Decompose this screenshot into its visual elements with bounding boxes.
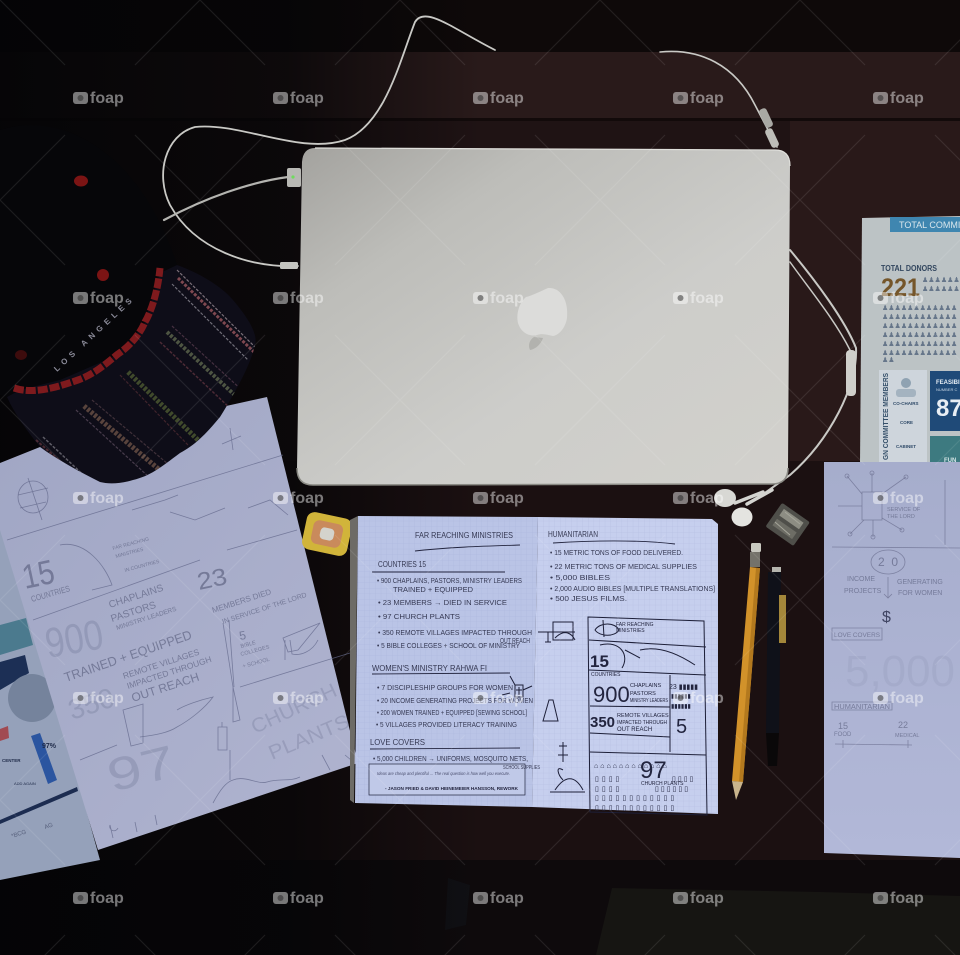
watermark row 3: foap [290,490,324,507]
watermark row 2: foap [490,290,524,307]
printed report, top right: ♟♟ [882,356,895,364]
thumbnail infographic sketch: PASTORS [630,691,656,697]
printed report, top right: FUN [944,458,956,464]
pencil sketch paper: COUNTRIES [30,583,71,604]
icon: apple logo [517,288,567,350]
pencil sketch paper: PASTORS [110,600,158,625]
printed report, top right: CO-CHAIRS [893,401,918,406]
watermark row 5: foap [690,890,724,907]
left page text: FAR REACHING MINISTRIES [415,530,513,540]
metal pencil sharpener [765,503,810,546]
notebook with handwritten plan [350,516,718,815]
watermark row 3: foap [90,490,124,507]
thumbnail infographic sketch: COUNTRIES [591,672,621,678]
sketch paper, bottom right: FOOD [834,732,852,738]
thumbnail infographic sketch: ▮▮▮▮▮▮ [671,694,691,700]
sketch paper, bottom right: FOR WOMEN [898,590,942,597]
right page text: • 22 METRIC TONS OF MEDICAL SUPPLIES [550,564,697,571]
thumbnail infographic sketch: ▮▮▮▮▮▮ [671,704,691,710]
thumbnail infographic sketch: ⌂⌂⌂⌂⌂⌂⌂⌂⌂⌂⌂⌂ [594,763,669,770]
watermark row 1: foap [290,90,324,107]
printed infographic under the sketch, left edge: AG [44,822,54,831]
watermark row 3 [73,490,924,507]
left page text: • 20 INCOME GENERATING PROJECTS FOR WOMEN [377,698,533,705]
pencil sketch paper: 350 [64,682,118,726]
pencil sketch paper: 97 [102,735,180,802]
magsafe charger plug [280,168,301,269]
left page text: WOMEN'S MINISTRY RAHWA FI [372,663,487,673]
earbuds and remote [714,107,856,526]
printed report, top right: ♟♟♟♟♟♟♟♟♟♟♟♟ [882,313,957,321]
sketch paper, bottom right: GENERATING [897,579,943,586]
thumbnail infographic sketch: ▯▯▯▯▯▯▯▯▯▯▯▯ [595,795,677,802]
pencil sketch paper: 15 [19,553,58,597]
printed report, top right: TOTAL DONORS [881,264,938,273]
thumbnail infographic sketch: ▯▯▯▯ [595,776,622,783]
left page text: - JASON FRIED & DAVID HEINEMEIER HANSSON, REWORK [385,786,519,792]
sketch paper, bottom right: LOVE COVERS [834,632,881,639]
left page text: LOVE COVERS [370,737,425,747]
thumbnail infographic sketch: 97 [640,757,667,784]
sketch paper, bottom right: PROJECTS [844,588,882,595]
baseball cap [7,176,256,484]
watermark row 5 [73,890,924,907]
thumbnail infographic sketch: IMPACTED THROUGH [617,720,667,726]
doodles beside sketch panel [502,622,585,792]
silver laptop lid [297,148,790,485]
watermark row 3: foap [690,490,724,507]
sketch paper, bottom right: HUMANITARIAN [834,702,890,711]
black pen [766,567,786,766]
pencil sketch paper [0,397,358,850]
right page text: HUMANITARIAN [548,529,598,539]
white charging and headphone cables [163,16,856,500]
watermark row 4: foap [90,690,124,707]
printed report, top right: CORE [900,420,913,425]
printed report, top right: CABINET [896,444,916,449]
watermark row 4 [73,690,924,707]
foap watermarks [73,90,924,907]
woven stripes on brim [36,270,255,484]
printed report, top right: NUMBER C [936,387,957,392]
pencil sketch paper: 900 [41,611,107,667]
pencil sketch paper: MINISTRIES [115,547,145,560]
watermark row 1 [73,90,924,107]
pencil sketch paper: + SCHOOL [242,657,271,670]
pencil sketch paper: MEMBERS DIED [211,587,273,615]
left page text: • 5 BIBLE COLLEGES + SCHOOL OF MINISTRY [377,643,520,650]
watermark row 1: foap [890,90,924,107]
sketch paper, bottom right: 20 [878,555,898,569]
left page text: • 23 MEMBERS → DIED IN SERVICE [378,600,507,607]
watermark row 4: foap [290,690,324,707]
pencil sketch paper: IMPACTED THROUGH [126,654,213,691]
printed report, top right: ♟♟♟♟♟♟♟♟♟♟♟♟ [882,331,957,339]
printed report, top right: GN COMMITTEE MEMBERS [883,373,890,460]
pencil sketch paper: OUT REACH [130,670,201,705]
printed infographic under the sketch, left edge: 97% [42,743,57,750]
pencil sketch paper: MINISTRY LEADERS [115,606,178,632]
sketch paper, bottom right: MEDICAL [895,733,919,739]
pencil sketch paper: TRAINED + EQUIPPED [62,627,194,685]
pencil sketch paper: IN COUNTRIES [124,559,161,574]
watermark row 3: foap [490,490,524,507]
watermark row 1: foap [490,90,524,107]
left page text: • 900 CHAPLAINS, PASTORS, MINISTRY LEADERS [377,578,522,585]
thumbnail infographic sketch: ▯▯▯▯ [672,776,695,783]
pencil sketch paper: BIBLE [240,640,257,650]
thumbnail infographic sketch: CHURCH PLANTS [641,781,684,787]
printed report, top right: ♟♟♟♟♟♟ [922,285,960,293]
thumbnail infographic sketch [588,617,707,815]
pencil sketch paper: PLANTS [265,711,353,765]
sketch paper, bottom right [824,462,960,858]
printed report, top right: ♟♟♟♟♟♟♟♟♟♟♟♟ [882,322,957,330]
printed report, top right: ♟♟♟♟♟♟♟♟♟♟♟♟ [882,349,957,357]
thumbnail infographic sketch: OUT REACH [617,727,652,733]
eraser [301,511,353,557]
watermark row 2: foap [890,290,924,307]
left page text: • 5 VILLAGES PROVIDED LITERACY TRAINING [376,722,517,729]
pencil sketch paper: CHAPLAINS [108,583,165,611]
printed report, top right [860,216,960,464]
pencil sketch paper: IN SERVICE OF THE LORD [221,592,308,626]
printed report, top right: ♟♟♟♟♟♟♟♟♟♟♟♟ [882,304,957,312]
thumbnail infographic sketch: MINISTRIES [616,628,645,634]
baseball cap: LOS ANGELES [52,296,134,373]
watermark row 4: foap [890,690,924,707]
right page text: • 15 METRIC TONS OF FOOD DELIVERED. [550,550,683,557]
printed report, top right: ♟♟♟♟♟♟♟♟♟♟♟♟ [882,340,957,348]
watermark row 5: foap [890,890,924,907]
thumbnail infographic sketch: FAR REACHING [616,622,654,628]
right page text: • 500 JESUS FILMS. [550,596,627,603]
sketch paper, bottom right: 22 [898,720,908,730]
thumbnail infographic sketch: CHAPLAINS [630,683,662,689]
left page text: SCHOOL SUPPLIES [503,765,541,771]
watermark row 1: foap [690,90,724,107]
watermark row 4: foap [690,690,724,707]
left page text: • 7 DISCIPLESHIP GROUPS FOR WOMEN [377,685,513,692]
watermark row 1: foap [90,90,124,107]
left page text: • 350 REMOTE VILLAGES IMPACTED THROUGH [378,630,532,637]
sketch paper, bottom right: 15 [838,721,848,731]
watermark row 2: foap [290,290,324,307]
pencil sketch paper: REMOTE VILLAGES [122,647,201,681]
printed report, top right: 221 [881,274,920,302]
pencil sketch paper: COLLEGES [240,644,270,658]
sketch paper, bottom right: $ [882,609,891,626]
thumbnail infographic sketch: 350 [590,714,615,731]
thumbnail infographic sketch: MINISTRY LEADERS [630,698,668,704]
watermark row 5: foap [290,890,324,907]
left page text: • 97 CHURCH PLANTS [378,614,460,621]
left page text: • 200 WOMEN TRAINED + EQUIPPED [SEWING SCHOOL] [377,710,527,717]
right page text: • 2,000 AUDIO BIBLES [MULTIPLE TRANSLATIONS] [550,586,715,593]
thumbnail infographic sketch: ▯▯▯▯ [595,786,622,793]
pencil sketch paper: 5 [238,628,247,643]
thumbnail infographic sketch: ▯▯▯▯▯▯▯▯▯▯▯▯ [595,805,677,812]
left page text: • 5,000 CHILDREN → UNIFORMS, MOSQUITO NETS, [373,756,528,763]
printed infographic under the sketch, left edge [0,500,100,880]
right page text [548,529,715,603]
left page text: COUNTRIES 15 [378,559,426,569]
thumbnail infographic sketch: REMOTE VILLAGES [617,713,669,719]
yellow pencil [732,543,761,800]
thumbnail infographic sketch: ▯▯▯▯▯▯ [655,786,690,793]
left page text: TRAINED + EQUIPPED [393,587,473,594]
red embroidered script [14,268,160,391]
left page text: Ideas are cheap and plentiful ... The real question is how well you execute. [377,771,510,776]
sketch paper, bottom right: SERVICE OF [887,507,921,513]
printed infographic under the sketch, left edge: CENTER [2,758,21,763]
sketch paper, bottom right: THE LORD [887,514,915,520]
left page text [369,530,541,795]
watermark row 2 [73,290,924,307]
watermark row 5: foap [490,890,524,907]
thumbnail infographic sketch: 5 [676,716,687,738]
left page text: OUT REACH [500,638,530,645]
printed infographic under the sketch, left edge: *BCG [11,829,28,840]
printed report, top right: ♟♟♟♟♟♟ [922,276,960,284]
watermark row 4: foap [490,690,524,707]
thumbnail infographic sketch: 23 ▮▮▮▮▮ [669,684,698,691]
right page text: • 5,000 BIBLES [550,575,610,582]
sketch paper, bottom right: 5,000 [845,647,955,696]
watermark row 2: foap [690,290,724,307]
thumbnail infographic sketch: 900 [593,682,630,707]
sketch paper, bottom right: INCOME [847,576,875,583]
printed report, top right: FEASIBI [936,380,960,386]
thumbnail infographic sketch: 15 [590,652,609,671]
watermark row 5: foap [90,890,124,907]
pencil sketch paper: FAR REACHING [112,536,150,552]
pencil sketch paper: 23 [195,563,230,596]
printed infographic under the sketch, left edge: ADD AGAIN [14,781,36,786]
pencil sketch paper: CHURCH [248,680,340,739]
watermark row 3: foap [890,490,924,507]
watermark row 2: foap [90,290,124,307]
